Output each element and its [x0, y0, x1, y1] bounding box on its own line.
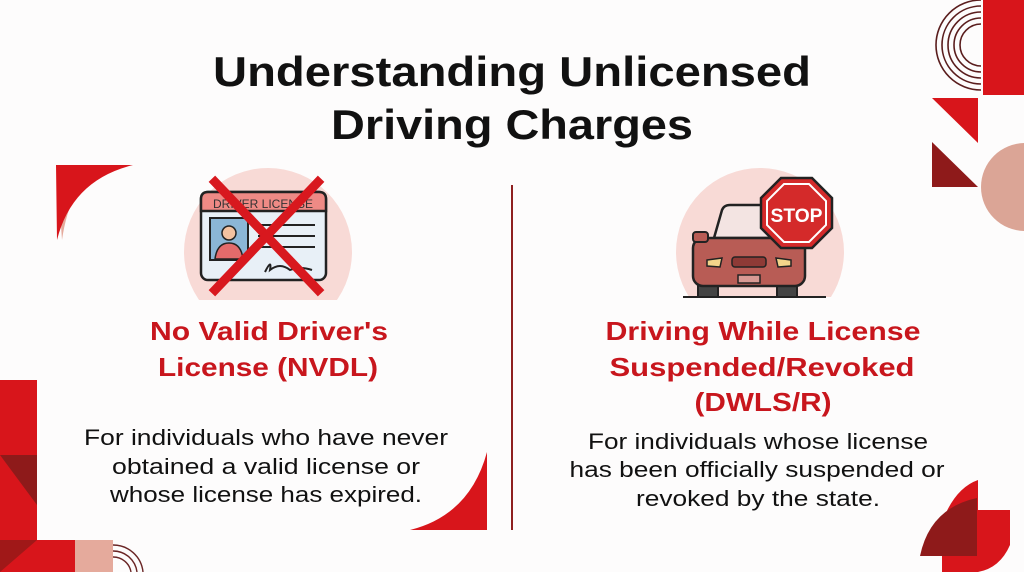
body: DWLS/R	[570, 429, 944, 511]
panel: NVDL	[84, 168, 448, 507]
icon: crossed-out driver license: DRIVER LICENSE	[213, 197, 313, 211]
decoration: top right	[932, 0, 1024, 231]
body: DWLS/R: has been officially suspended or	[570, 457, 944, 482]
heading: DWLS/R	[606, 316, 920, 417]
heading: NVDL	[150, 316, 388, 382]
decoration: bottom left	[0, 380, 143, 572]
heading: DWLS/R: (DWLS/R)	[694, 387, 832, 417]
icon: car with stop sign: STOP	[770, 206, 823, 227]
title: Driving Charges	[331, 101, 693, 148]
decoration: mid curved triangle	[410, 452, 487, 530]
body: DWLS/R: For individuals whose license	[588, 429, 928, 454]
heading: NVDL: No Valid Driver's	[150, 316, 388, 346]
title	[213, 48, 811, 148]
heading: NVDL: License (NVDL)	[158, 352, 378, 382]
body: NVDL: obtained a valid license or	[112, 454, 420, 479]
icon: crossed-out driver license	[184, 168, 352, 300]
body: NVDL: For individuals who have never	[84, 425, 448, 450]
heading: DWLS/R: Suspended/Revoked	[610, 352, 914, 382]
heading: DWLS/R: Driving While License	[606, 316, 920, 346]
body: NVDL	[84, 425, 448, 507]
decoration: left corner curve	[56, 165, 133, 240]
body: NVDL: whose license has expired.	[109, 482, 422, 507]
icon: car with stop sign	[676, 168, 844, 298]
decoration: bottom right	[920, 480, 1010, 572]
divider	[511, 185, 513, 530]
body: DWLS/R: revoked by the state.	[636, 486, 880, 511]
title: Understanding Unlicensed	[213, 48, 811, 95]
panel: DWLS/R	[570, 168, 944, 511]
